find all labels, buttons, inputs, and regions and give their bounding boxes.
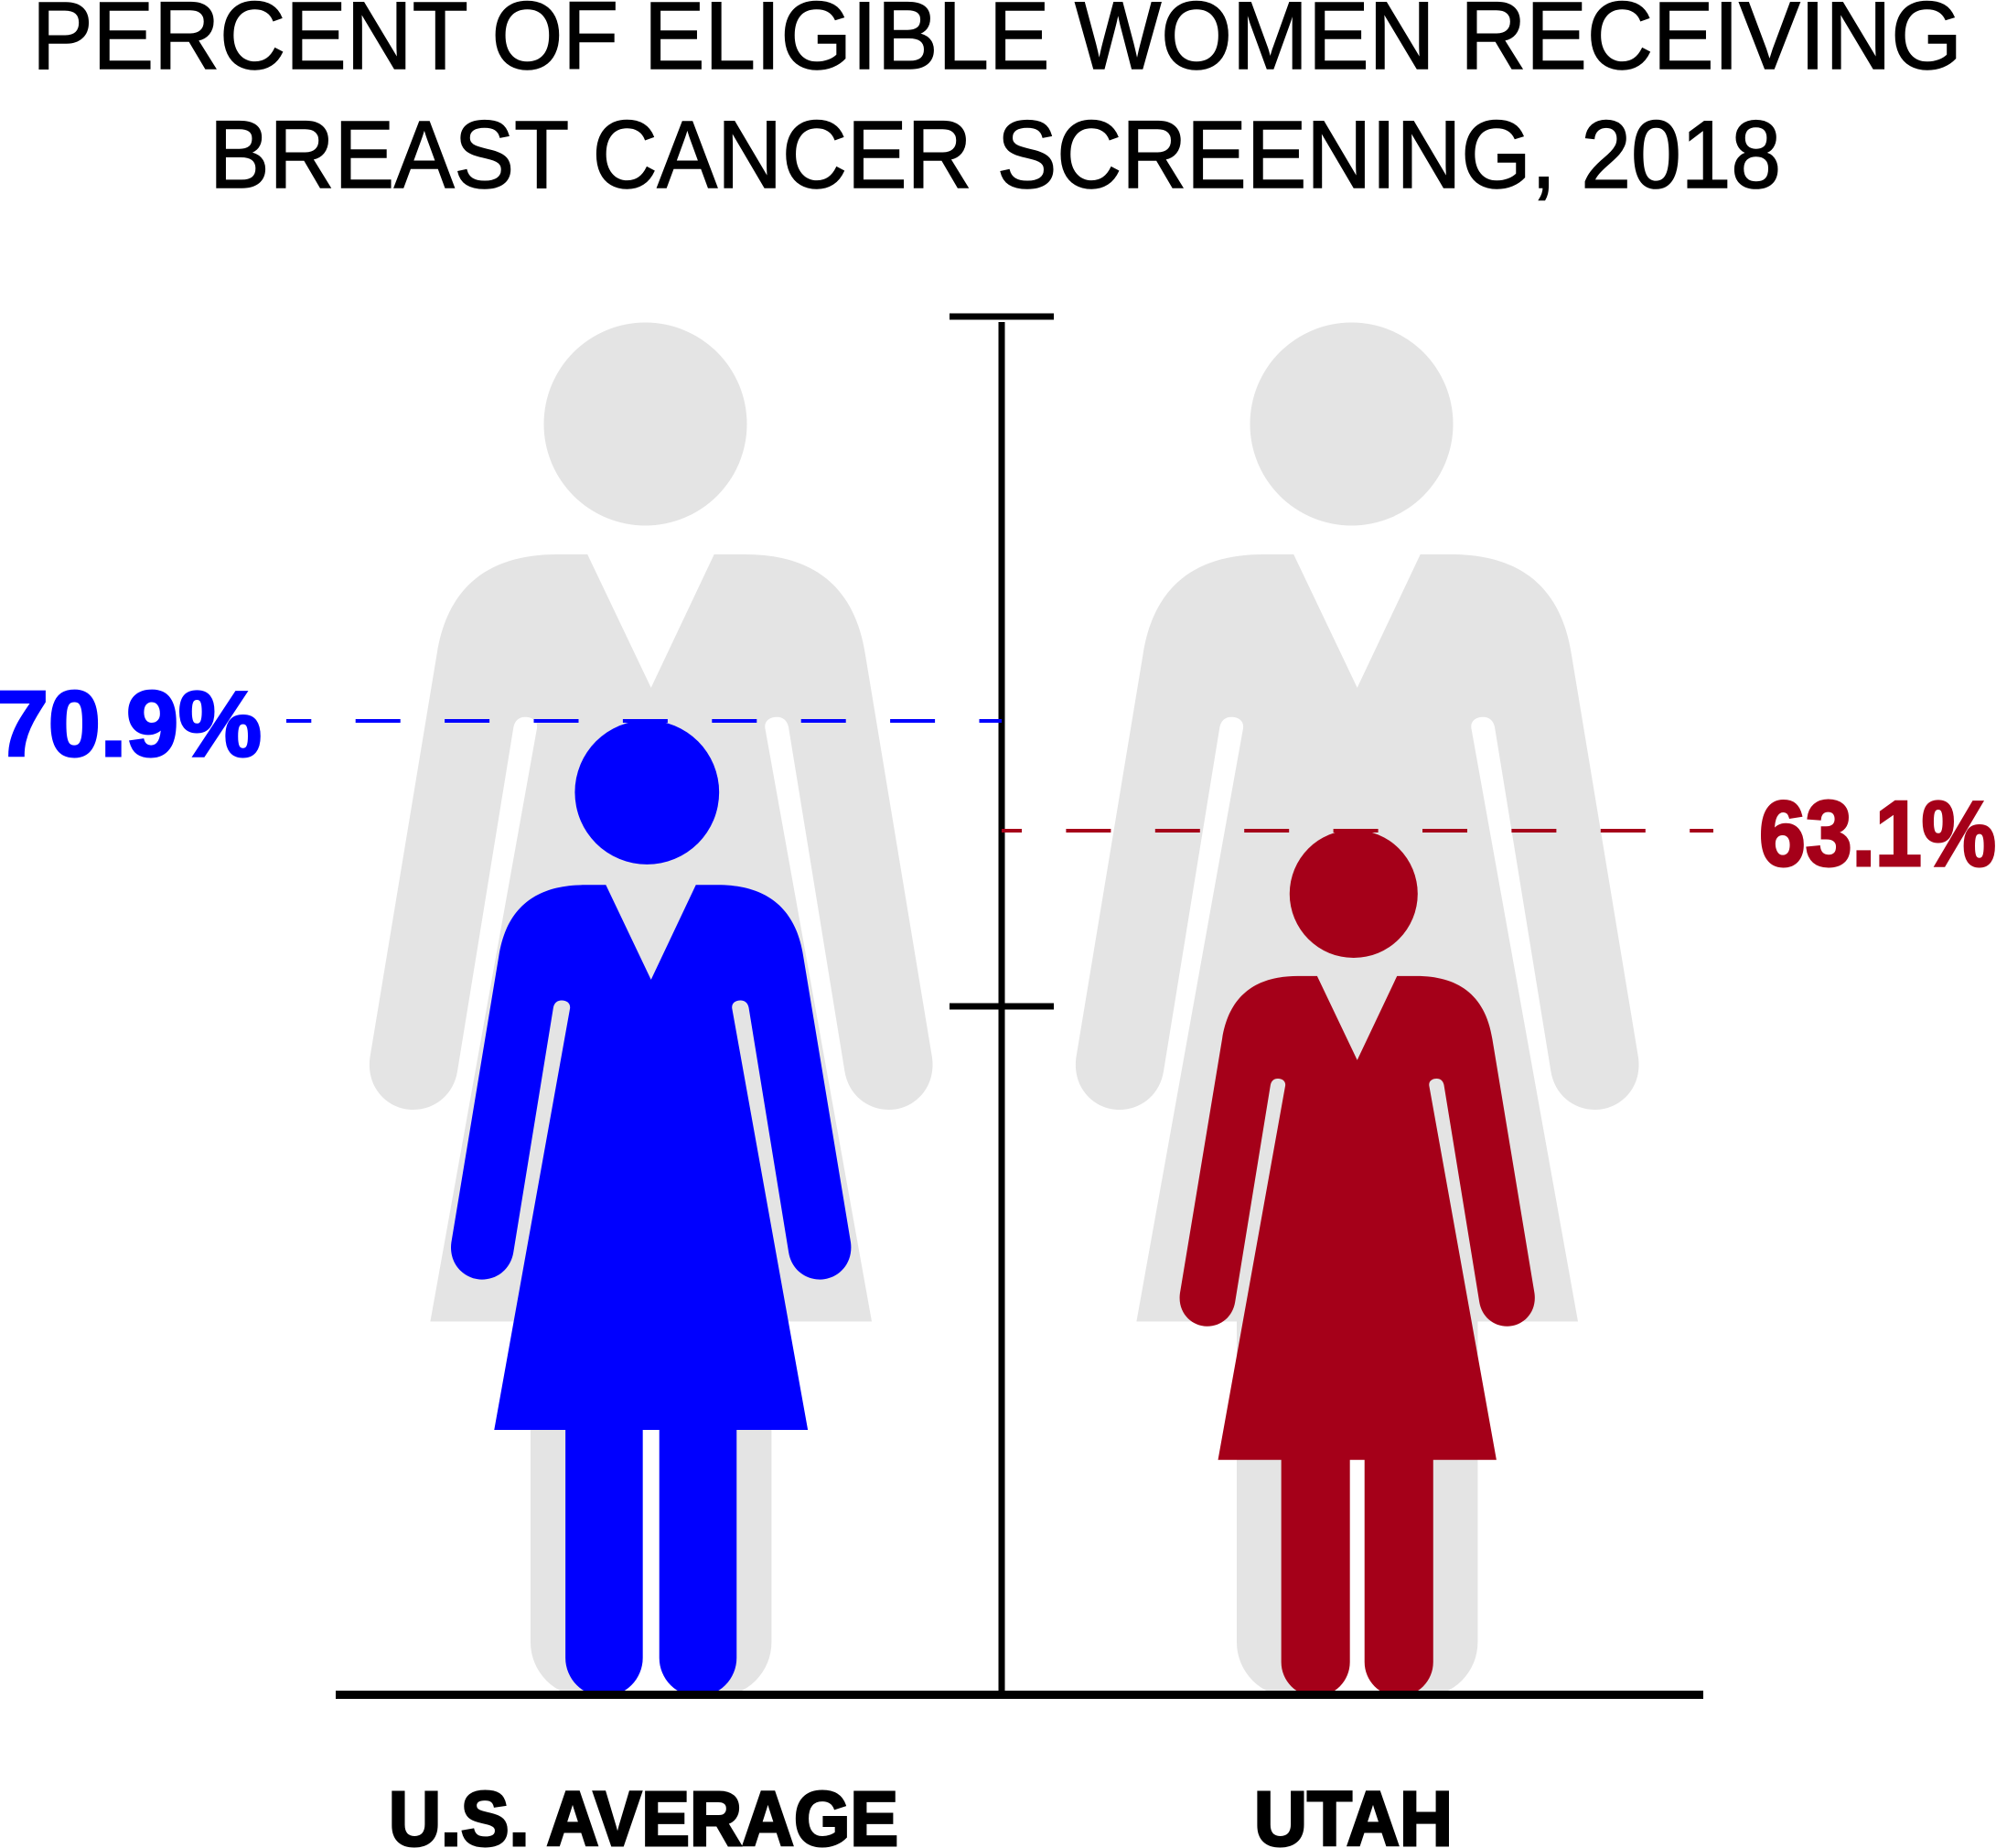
vertical axis with ticks [950,317,1054,1694]
grey figure: U.S. full scale [370,322,933,1696]
title [32,0,1962,209]
dashed line: Utah level [1002,829,1713,833]
title: BREAST CANCER SCREENING, 2018 [209,102,1781,209]
blue figure: U.S. average 70.9% [451,720,851,1696]
grey figure: Utah full scale [1076,322,1639,1696]
baseline [336,1691,1703,1699]
red figure: Utah 63.1% [1180,830,1535,1696]
value label: 70.9%: 70.9% [0,673,262,776]
dashed line: U.S. level [286,719,1002,723]
